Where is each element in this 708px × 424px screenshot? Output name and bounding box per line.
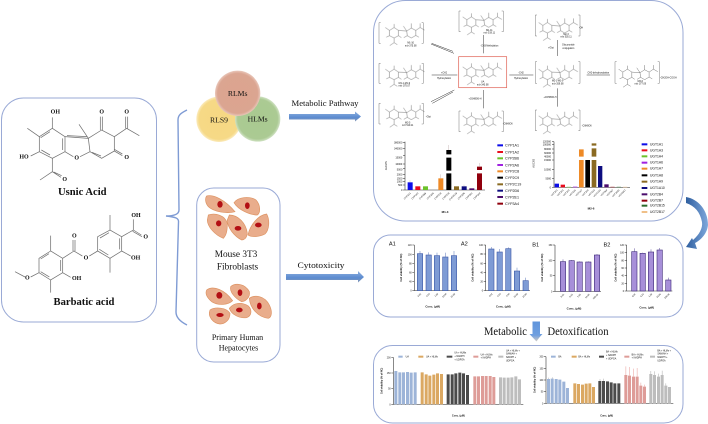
legend: UGT isoforms <box>642 142 665 214</box>
arrow: down <box>531 322 542 342</box>
chart: usnic acid detoxification: UA + HLMs <box>426 356 439 359</box>
concentration tick labels: 0.10 <box>426 293 431 298</box>
chart: barbatic acid detoxification: 50 <box>541 392 544 394</box>
chart: A2: 100 <box>479 245 484 247</box>
chart: barbatic acid detoxification: 100 <box>539 380 544 382</box>
heading: metabolic detoxification: Metabolic <box>484 326 527 338</box>
barbatic acid structure: OH <box>72 276 82 282</box>
chart: barbatic acid detoxification: UDPGA <box>657 359 666 362</box>
chart: B1 <box>532 243 601 310</box>
bar chart: M1-3 by CYP isoform: 1500 <box>397 178 403 181</box>
panel: cell models <box>197 188 280 362</box>
chart: usnic acid detoxification: UA + HLMs + <box>506 349 520 352</box>
legend: UGT isoforms: UGT1A1 <box>650 142 663 146</box>
legend: UGT isoforms: UGT1A8 <box>650 173 663 177</box>
chart: barbatic acid detoxification: BA + HLMs <box>632 353 644 356</box>
concentration tick labels: 0.01 <box>489 293 494 298</box>
metabolic pathway scheme: +CH2 <box>441 73 448 75</box>
chart: A1: A1 <box>389 242 396 248</box>
legend: CYP isoforms: CYP2C19 <box>505 183 521 187</box>
arrow: cytotoxicity <box>286 271 364 282</box>
metabolic pathway scheme: -Glut <box>426 115 431 118</box>
barbatic acid structure <box>15 213 148 293</box>
label: metabolic pathway: Metabolic Pathway <box>292 99 358 108</box>
usnic acid structure: O <box>124 110 129 116</box>
chart: A1: 60 <box>409 272 412 274</box>
legend: UGT isoforms: UGT1A9 <box>650 180 663 184</box>
chart: barbatic acid detoxification: BA <box>558 356 562 359</box>
chart: B2 <box>604 243 672 309</box>
chart: barbatic acid detoxification: + NADPH <box>606 354 616 357</box>
bar chart: M1-3 by CYP isoform: 380000 <box>394 141 403 144</box>
metabolic pathway scheme: M2-5 <box>405 122 411 124</box>
bar chart: M2-6 by UGT isoform: UGT2B17 <box>619 189 627 198</box>
bar chart: M2-6 by UGT isoform: UGT1A6 <box>569 188 577 197</box>
bar chart: M2-6 by UGT isoform: UGT2B7 <box>607 189 615 197</box>
heading: metabolic detoxification <box>484 326 609 338</box>
chart: barbatic acid detoxification: 0 <box>542 403 544 405</box>
bar chart: M2-6 by UGT isoform: UGT1A9 <box>588 188 596 197</box>
bar chart: M1-3 by CYP isoform: 0 <box>401 189 403 192</box>
metabolic pathway scheme: +C6H8O6-H <box>544 97 557 99</box>
venn diagram: enzyme systems: HLMs <box>248 115 268 124</box>
chart: A1: 100 <box>408 254 412 256</box>
chart: B1: B1 <box>532 243 539 249</box>
panel: cytotoxicity results <box>374 235 683 317</box>
concentration tick labels: 1.00 <box>435 293 440 298</box>
legend: UGT isoforms: UGT1A6 <box>650 161 663 165</box>
metabolic pathway scheme: -C6H8O6 <box>503 124 513 126</box>
bar chart: M1-3 by CYP isoform: 500 <box>398 184 403 187</box>
metabolic pathway scheme: Hydroxylation <box>437 77 452 80</box>
bar chart: M1-3 by CYP isoform: 15000 <box>395 157 403 160</box>
concentration tick labels: 0.01 <box>418 293 423 298</box>
panel: detoxification results <box>374 346 683 423</box>
metabolic pathway scheme: m/z 519.11 <box>402 125 414 127</box>
chart: A2: Conc. (μM) <box>496 305 511 309</box>
concentration tick labels: 10.00 <box>656 293 662 299</box>
venn diagram: enzyme systems: RLS9 <box>210 115 228 124</box>
legend: UGT isoforms: UGT2B4 <box>650 192 663 196</box>
concentration tick labels: 1.00 <box>577 293 582 298</box>
chart: usnic acid detoxification: + NADPH <box>454 355 465 358</box>
label: cytotoxicity: Cytotoxicity <box>298 260 345 270</box>
barbatic acid structure: O <box>25 276 30 282</box>
chart: B1: Conc. (μM) <box>567 306 581 310</box>
metabolic pathway scheme: M1-11 <box>486 30 493 32</box>
metabolic pathway scheme: -CH2OH-COOH <box>660 77 677 79</box>
label: mouse 3T3 fibroblasts: Fibroblasts <box>217 262 259 272</box>
metabolic pathway scheme: M1-1-M1-9 <box>552 81 564 83</box>
chart: A1: Cell viability (% of NC) <box>399 253 403 282</box>
concentration tick labels: 0.01 <box>561 293 566 298</box>
legend: UGT isoforms: UGT2B7 <box>650 199 663 203</box>
metabolic pathway scheme: Hydroxylation <box>514 77 529 80</box>
bar chart: M2-6 by UGT isoform: M2-6 <box>588 207 595 211</box>
bar chart: M1-3 by CYP isoform: 340000 <box>394 147 403 150</box>
icon: fibroblast cells <box>206 196 269 240</box>
metabolic pathway scheme: +C6H8O6-H <box>469 98 482 100</box>
legend: CYP isoforms: CYP2D6 <box>505 189 519 193</box>
chart: B1: 150 <box>548 245 553 247</box>
bar chart: M1-3 by CYP isoform: CYP1A2 <box>411 191 420 200</box>
metabolic pathway scheme: -CH3 Methylation <box>480 44 499 47</box>
metabolic pathway scheme <box>379 11 677 134</box>
concentration tick labels: 0.01 <box>632 293 637 298</box>
brace connector <box>166 110 187 325</box>
bar chart: M2-6 by UGT isoform: AUC/IS <box>532 159 536 168</box>
usnic acid structure: O <box>99 110 104 116</box>
chart: B2: 0 <box>623 291 625 293</box>
bar chart: M1-3 by CYP isoform: CYP2C19 <box>449 192 459 201</box>
metabolic pathway scheme: CH2-dehydroxylation <box>587 72 610 75</box>
chart: A2: 20 <box>480 282 484 284</box>
box: parent compound <box>459 57 507 88</box>
metabolic pathway scheme: -CH2 <box>518 73 524 75</box>
chart: barbatic acid detoxification: BA + HLMs <box>606 351 619 354</box>
metabolic pathway scheme: m/z 343.08 <box>477 84 489 86</box>
usnic acid structure: O <box>62 177 67 183</box>
bar chart: M2-6 by UGT isoform: 40000 <box>544 155 552 158</box>
chart: usnic acid detoxification: UA + HLMs <box>481 353 493 356</box>
chart: usnic acid detoxification: UDPGA <box>506 359 515 362</box>
concentration tick labels: 0.10 <box>497 293 502 298</box>
bar chart: M2-6 by UGT isoform: 15000 <box>544 159 552 162</box>
chart: barbatic acid detoxification: 200 <box>539 357 544 359</box>
barbatic acid structure: O <box>143 234 148 240</box>
chart: barbatic acid detoxification: BA + HLMs + <box>657 349 672 352</box>
bar chart: M1-3 by CYP isoform: AUC/IS <box>384 161 388 170</box>
bar chart: M1-3 by CYP isoform: CYP2A6 <box>426 191 435 200</box>
legend: CYP isoforms: CYP2C8 <box>505 170 519 174</box>
chart: usnic acid detoxification: UA <box>406 356 409 359</box>
metabolic pathway scheme: -OH <box>579 27 583 29</box>
metabolic pathway scheme: m/z 375.07 <box>399 86 411 88</box>
metabolic pathway scheme: M1-1-M1-9 <box>399 83 411 85</box>
metabolic pathway scheme: m/z 377.09 <box>635 84 647 86</box>
icon: hepatocyte cells <box>206 284 271 324</box>
legend: CYP isoforms: CYP1A2 <box>505 150 519 154</box>
panel: metabolic pathway results <box>374 0 683 221</box>
legend: CYP isoforms: CYP2A6 <box>505 163 519 167</box>
panel: parent compounds <box>2 98 156 322</box>
chart: barbatic acid detoxification: BA + HLMs <box>578 356 591 359</box>
chart: B2: 120 <box>620 245 625 247</box>
bar chart: M1-3 by CYP isoform: 5000 <box>397 169 403 172</box>
concentration tick labels: 100.00 <box>593 293 600 300</box>
bar chart: M1-3 by CYP isoform: CYP2E1 <box>466 192 474 200</box>
bar chart: M1-3 by CYP isoform: 10000 <box>395 163 403 166</box>
chart: A2: 60 <box>480 263 484 265</box>
usnic acid structure: O <box>74 155 79 161</box>
bar chart: M2-6 by UGT isoform: UGT1A7 <box>575 188 584 197</box>
bar chart: M2-6 by UGT isoform: UGT1A8 <box>581 188 590 197</box>
bar chart: M1-3 by CYP isoform: CYP2C8 <box>435 192 443 200</box>
usnic acid structure: OH <box>51 110 60 116</box>
bar chart: M2-6 by UGT isoform: UGT1A4 <box>562 188 571 197</box>
concentration tick labels: 25.00 <box>451 293 457 299</box>
chart: barbatic acid detoxification: + NADPH <box>632 357 642 360</box>
metabolic pathway scheme: M2-6 <box>638 81 644 83</box>
chart: A1: 40 <box>409 282 412 284</box>
chart: A2: 40 <box>480 272 484 274</box>
bar chart: M1-3 by CYP isoform: CYP2D6 <box>458 192 466 200</box>
barbatic acid structure: O <box>72 233 77 239</box>
chart: B2: 40 <box>621 276 625 278</box>
chart: usnic acid detoxification: 0 <box>389 404 391 406</box>
concentration tick labels: 10.00 <box>585 293 591 299</box>
barbatic acid structure: OH <box>131 256 141 262</box>
legend: CYP isoforms <box>497 144 521 206</box>
chart: usnic acid detoxification: NADPH + <box>506 356 517 359</box>
chart: barbatic acid detoxification: Conc. (μM) <box>600 415 613 418</box>
heading: metabolic detoxification: Detoxification <box>548 326 609 338</box>
bar chart: M2-6 by UGT isoform: 60000 <box>544 152 552 155</box>
legend: CYP isoforms: CYP2B6 <box>505 157 519 161</box>
chart: barbatic acid detoxification: SAM/AH + <box>657 353 669 356</box>
chart: barbatic acid detoxification: Cell viability (% of NC) <box>533 367 536 393</box>
metabolic pathway scheme: UA <box>481 80 485 83</box>
usnic acid structure: HO <box>19 155 29 161</box>
chart: A2: Cell viability (% of NC) <box>470 253 474 282</box>
metabolic pathway scheme: m/z 535.11 <box>560 37 572 39</box>
chart: B2: 80 <box>621 260 625 262</box>
chart: barbatic acid detoxification: + UDPGA <box>606 357 617 360</box>
chart: B2: Conc. (μM) <box>639 305 654 309</box>
usnic acid structure: O <box>124 155 129 161</box>
bar chart: M2-6 by UGT isoform <box>532 140 630 211</box>
chart: B2: Cell viability (% of NC) <box>614 253 618 282</box>
chart: B2: B2 <box>604 243 610 249</box>
bar chart: M1-3 by CYP isoform: CYP2B6 <box>419 192 428 200</box>
chart: B1: 100 <box>548 261 553 263</box>
label: mouse 3T3 fibroblasts: Mouse 3T3 <box>215 250 258 260</box>
chart: usnic acid detoxification <box>381 349 523 418</box>
chart: usnic acid detoxification: + UDPGA <box>454 358 465 361</box>
barbatic acid structure: OH <box>131 213 141 219</box>
bar chart: M1-3 by CYP isoform <box>384 141 485 214</box>
bar chart: M2-6 by UGT isoform: 10000 <box>544 168 552 171</box>
bar chart: M2-6 by UGT isoform: 5000 <box>545 177 552 180</box>
chart: B2: 20 <box>621 283 625 285</box>
concentration tick labels: 0.10 <box>640 293 645 298</box>
bar chart: M2-6 by UGT isoform: UGT1A3 <box>556 188 565 197</box>
chart: A1: 0 <box>410 291 412 293</box>
legend: UGT isoforms: UGT2B17 <box>650 210 665 214</box>
chart: usnic acid detoxification: UA + HLMs <box>454 352 467 355</box>
metabolic pathway scheme: m/z 375.08 <box>405 45 417 47</box>
metabolic pathway scheme: M1-10 <box>407 43 415 45</box>
bar chart: M1-3 by CYP isoform: CYP2C9 <box>443 192 451 200</box>
chart: A1: 120 <box>408 245 412 247</box>
legend: CYP isoforms: CYP2C9 <box>505 176 519 180</box>
legend: CYP isoforms: CYP3A4 <box>505 202 519 206</box>
legend: CYP isoforms: CYP1A1 <box>505 144 519 148</box>
chart: A2: 0 <box>482 291 484 293</box>
chart: B1: Cell viability (% of NC) <box>540 253 544 282</box>
label: primary human hepatocytes: Hepatocytes <box>219 344 258 352</box>
venn diagram: enzyme systems <box>196 71 280 142</box>
barbatic acid structure: O <box>84 256 89 262</box>
legend: UGT isoforms: UGT2B15 <box>650 204 665 208</box>
chart: A2: A2 <box>461 242 468 248</box>
metabolic pathway scheme: Glucuronide <box>562 44 575 47</box>
chart: B1: 50 <box>550 276 553 278</box>
legend: UGT isoforms: UGT1A7 <box>650 167 663 171</box>
concentration tick labels <box>418 293 671 300</box>
chart: A2 <box>461 242 530 309</box>
chart: usnic acid detoxification: Cell viability (% of NC) <box>381 368 384 394</box>
metabolic pathway scheme: -C6H8O6 <box>582 126 592 128</box>
arrow: metabolic detoxification <box>530 322 542 341</box>
chart: A2: 80 <box>480 254 484 256</box>
legend: CYP isoforms: CYP2E1 <box>505 195 519 199</box>
usnic acid structure <box>19 110 139 183</box>
bar chart: M2-6 by UGT isoform: 80000 <box>544 148 552 151</box>
bar chart: M1-3 by CYP isoform: 2000 <box>397 173 403 176</box>
metabolic pathway scheme: m/z 519.11 <box>484 32 496 34</box>
label: barbatic acid: Barbatic acid <box>54 297 115 308</box>
metabolic pathway scheme: conjugation <box>562 47 575 50</box>
chart: barbatic acid detoxification: NADPH + <box>657 356 668 359</box>
legend: UGT isoforms: UGT1A4 <box>650 154 663 158</box>
concentration tick labels: 100.00 <box>664 293 671 300</box>
venn diagram: enzyme systems: RLMs <box>228 89 247 98</box>
chart: A1 <box>389 242 458 309</box>
chart: usnic acid detoxification: SAM/AH + <box>506 353 518 356</box>
arrow: curved to cytotoxicity panel <box>686 197 708 249</box>
chart: B1: 0 <box>551 291 553 293</box>
legend: UGT isoforms: UGT1A3 <box>650 148 663 152</box>
bar chart: M1-3 by CYP isoform: M1-3 <box>442 210 449 214</box>
metabolic pathway scheme: m/z 359.08 <box>552 83 564 85</box>
arrow: metabolic pathway <box>289 112 361 122</box>
chart: B2: 60 <box>621 268 625 270</box>
chart: usnic acid detoxification: + NADPH <box>481 357 491 360</box>
chart: A1: 80 <box>409 263 412 265</box>
chart: barbatic acid detoxification <box>533 349 673 418</box>
bar chart: M2-6 by UGT isoform: 120000 <box>543 140 552 143</box>
chart: barbatic acid detoxification: 150 <box>539 368 544 370</box>
bar chart: M2-6 by UGT isoform: UGT1A10 <box>593 188 602 198</box>
chart: B2: 100 <box>620 253 625 255</box>
chart: usnic acid detoxification: 50 <box>388 389 391 391</box>
bar chart: M2-6 by UGT isoform: 100000 <box>543 144 552 147</box>
metabolic pathway scheme: +Glut <box>548 46 554 49</box>
metabolic pathway scheme: M2-3 <box>563 34 569 36</box>
chart: usnic acid detoxification: 150 <box>387 373 391 375</box>
bar chart: M2-6 by UGT isoform: UGT2B4 <box>601 189 609 197</box>
bar chart: M1-3 by CYP isoform: CYP1A1 <box>403 191 412 200</box>
chart: usnic acid detoxification: 200 <box>387 357 391 359</box>
concentration tick labels: 10.00 <box>442 293 448 299</box>
concentration tick labels: 0.10 <box>569 293 574 298</box>
bar chart: M1-3 by CYP isoform: 1000 <box>397 181 403 184</box>
label: primary human hepatocytes: Primary Human <box>212 333 263 342</box>
chart: A1: Conc. (μM) <box>425 305 440 309</box>
legend: UGT isoforms: UGT1A10 <box>650 186 665 190</box>
concentration tick labels: 1.00 <box>506 293 511 298</box>
label: usnic acid: Usnic Acid <box>58 187 107 198</box>
concentration tick labels: 25.00 <box>522 293 528 299</box>
concentration tick labels: 1.00 <box>649 293 654 298</box>
bar chart: M2-6 by UGT isoform: UGT2B15 <box>612 189 621 198</box>
bar chart: M1-3 by CYP isoform: CYP3A4 <box>473 191 482 200</box>
bar chart: M2-6 by UGT isoform: UGT1A1 <box>550 188 559 197</box>
concentration tick labels: 10.00 <box>514 293 520 299</box>
bar chart: M2-6 by UGT isoform: 0 <box>550 186 552 189</box>
chart: usnic acid detoxification: Conc. (μM) <box>452 415 465 418</box>
